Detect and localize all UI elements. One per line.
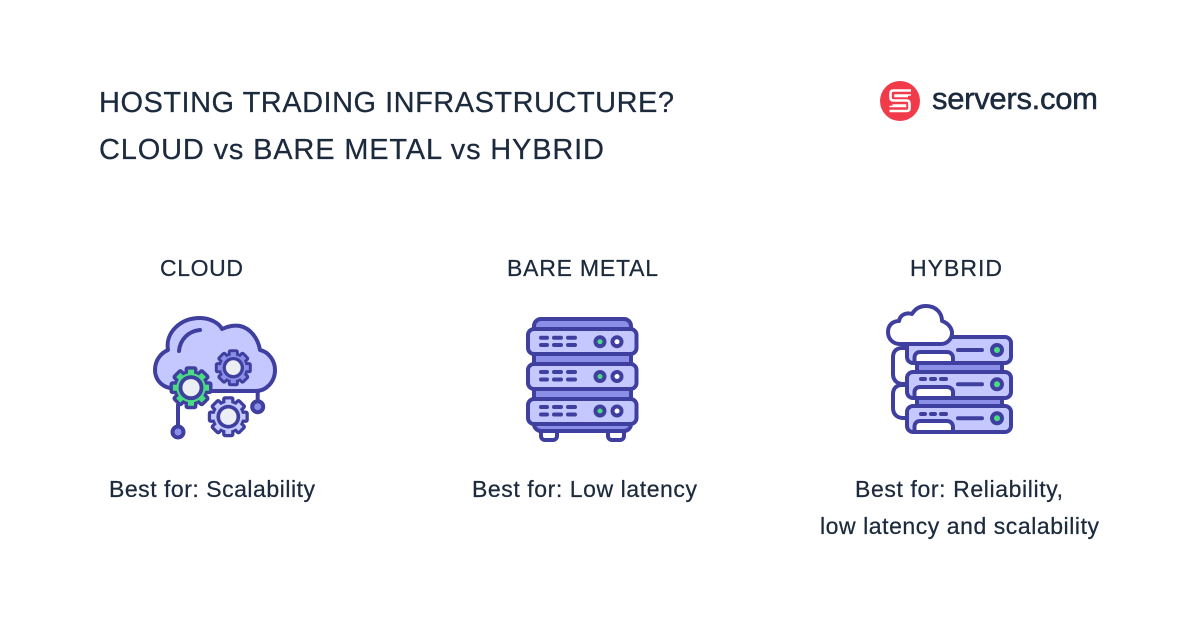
text: best for reliability	[820, 476, 1100, 539]
title: CLOUD vs BARE METAL vs HYBRID	[99, 134, 604, 166]
heading: cloud: CLOUD	[160, 255, 243, 281]
title: HOSTING TRADING INFRASTRUCTURE?	[99, 87, 674, 119]
logo: servers.com	[880, 81, 1098, 121]
icon: server rack	[528, 319, 636, 440]
title	[99, 87, 674, 166]
text: best for reliability: Best for: Reliability,	[855, 476, 1063, 502]
panel: hybrid	[820, 255, 1100, 539]
heading: hybrid: HYBRID	[910, 255, 1002, 281]
icon: cloud and servers	[888, 306, 1011, 432]
heading: bare metal: BARE METAL	[507, 255, 658, 281]
text: best for reliability: low latency and scalability	[820, 513, 1100, 539]
text: best for scalability: Best for: Scalability	[109, 476, 316, 502]
icon: cloud with gears	[155, 318, 275, 438]
panel: bare metal	[472, 255, 698, 502]
panel: cloud	[109, 255, 316, 502]
text: best for low latency: Best for: Low latency	[472, 476, 698, 502]
logo: servers.com: servers.com	[932, 81, 1098, 116]
